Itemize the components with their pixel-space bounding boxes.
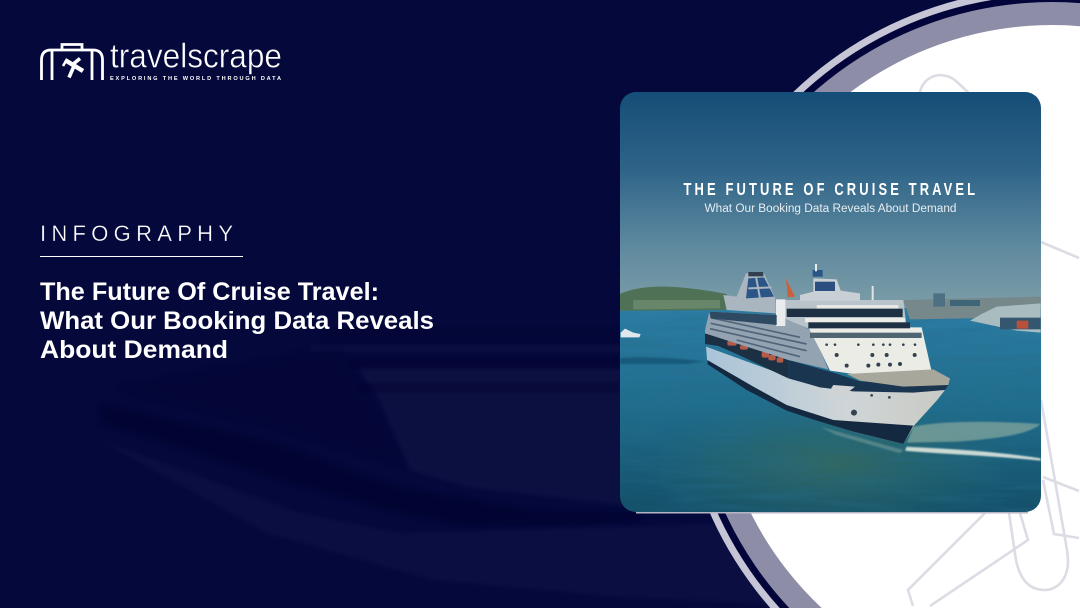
main heading: The Future Of Cruise Travel: [40, 278, 379, 306]
panel: cruise ship photo card [620, 92, 1041, 513]
photo: bridge mast [800, 278, 860, 301]
photo card bottom edge [636, 512, 1028, 514]
photo: bow deck [847, 369, 950, 387]
photo: lifeboats [727, 341, 783, 363]
photo: small boat [621, 329, 641, 337]
photo: side decks [705, 312, 828, 369]
photo: funnel tower [723, 272, 776, 313]
photo: white forward superstructure [808, 327, 932, 374]
photo: water ripples [671, 328, 1035, 512]
icon: suitcase with plane [42, 44, 102, 80]
photo: hull waterline [707, 360, 913, 444]
photo: anchor housing [830, 385, 855, 391]
background: ghost cruise ship [100, 327, 780, 604]
photo: navy stripe [788, 360, 948, 393]
decorative rings and white circle [678, 0, 1080, 608]
outline suitcase and plane pattern [908, 75, 1079, 606]
eyebrow label: INFOGRAPHY: INFOGRAPHY [40, 221, 233, 246]
photo: portholes [825, 343, 917, 416]
photo: hill [620, 287, 730, 311]
photo: sky [620, 92, 1041, 314]
photo caption: subtitle: What Our Booking Data Reveals About Demand [704, 203, 956, 215]
photo: water reflection [726, 418, 933, 504]
wordmark: travelscrape [110, 38, 282, 76]
tagline: EXPLORING THE WORLD THROUGH DATA [110, 76, 281, 82]
main heading [40, 278, 434, 364]
photo: hull [706, 347, 945, 444]
photo: shoreline and ship [620, 264, 1041, 461]
photo: water [620, 308, 1041, 513]
photo: docked ship [970, 303, 1041, 333]
main heading: About Demand [40, 336, 228, 364]
photo: far shore [903, 297, 1041, 319]
photo: upper decks [777, 300, 907, 329]
photo: window row [810, 333, 922, 338]
photo: hull wake [620, 357, 1041, 461]
photo: dark promenade deck [705, 332, 788, 378]
photo: red mast [786, 278, 795, 297]
divider under eyebrow [40, 256, 243, 257]
main heading: What Our Booking Data Reveals [40, 307, 434, 335]
photo caption: title: THE FUTURE OF CRUISE TRAVEL [684, 180, 975, 200]
logo: travelscrape [42, 38, 282, 82]
